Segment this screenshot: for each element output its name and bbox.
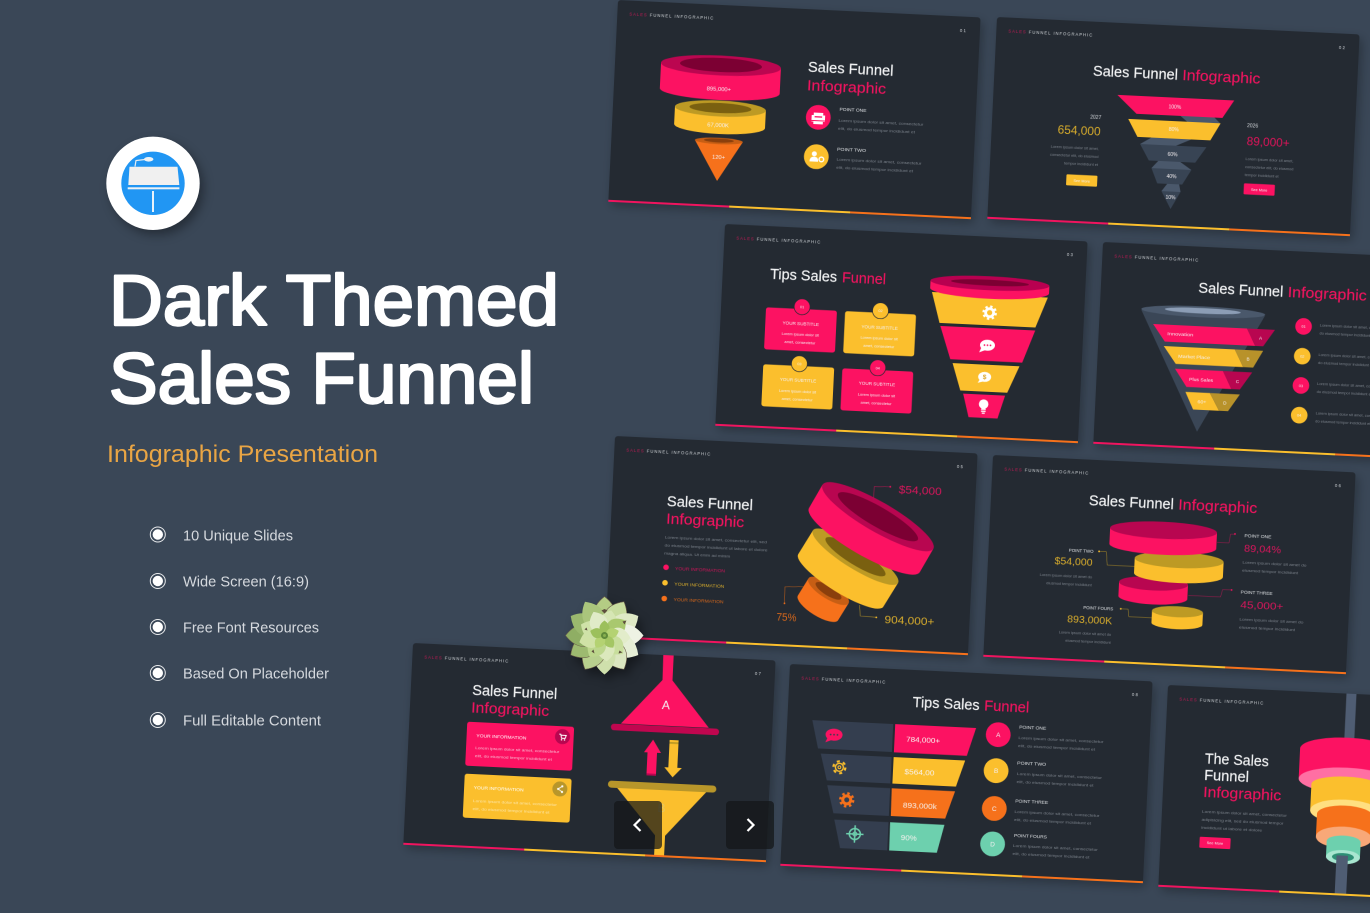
card: yellow information: YOUR INFORMATION: [474, 785, 524, 792]
icon: presentation app logo: [106, 137, 200, 230]
text: point fours: POINT FOURS: [1083, 605, 1113, 611]
list: points A to D: D: [990, 841, 995, 849]
text: point three: 45,000+: [1240, 599, 1284, 613]
card 01: 01: [800, 305, 804, 309]
heading: Infographic: [666, 512, 745, 531]
list: points A to D: elit, do eiusmod tempor incididunt et: [1014, 817, 1092, 826]
list of numbered points: 02: [1300, 355, 1304, 359]
heading: Sales Funnel: [472, 683, 558, 703]
text: point fours: eiusmod tempor incididunt: [1065, 638, 1112, 645]
panel: slide 05 tilted 3D funnel: SALES FUNNEL INFOGRAPHIC: [626, 448, 710, 457]
panel: slide 01 three tier funnel: [608, 0, 981, 219]
feature list: Free Font Resources: [183, 620, 319, 636]
text: point one: elit, do eiusmod tempor incididunt et: [838, 126, 916, 134]
funnel graphic: 10%: [1165, 195, 1176, 201]
text: point three: eiusmod tempor incididunt: [1239, 625, 1296, 632]
feature list: [150, 527, 329, 730]
heading: [666, 494, 753, 532]
title: Dark Themed: [109, 262, 559, 341]
text: point one: POINT ONE: [1244, 533, 1272, 539]
panel: slide 08 tips funnel table: SALES FUNNEL INFOGRAPHIC: [801, 676, 885, 685]
list: points A to D: C: [992, 806, 997, 813]
card 03: YOUR SUBTITLE: [780, 377, 816, 384]
feature list: Wide Screen (16:9): [183, 574, 309, 590]
card 03: Lorem ipsum dolor sit: [779, 388, 817, 395]
heading: Infographic: [1203, 785, 1282, 805]
callout: $54,000: [874, 483, 942, 503]
list: points A to D: Lorem ipsum dolor sit amet, consectetur: [1017, 771, 1103, 780]
funnel graphic: 40%: [1166, 174, 1177, 180]
card 02: 02: [878, 309, 883, 313]
funnel graphic: [656, 53, 781, 184]
nav button: next: [726, 801, 774, 849]
list of numbered points: [1291, 318, 1370, 428]
funnel graphic: [789, 470, 944, 632]
funnel graphic: [1095, 519, 1236, 632]
funnel graphic: 67,000K: [707, 122, 729, 129]
funnel graphic: 100%: [1168, 105, 1182, 111]
card: yellow information: [463, 774, 572, 823]
funnel graphic: [1136, 303, 1276, 435]
icon: chat: [825, 728, 843, 743]
funnel table: 893,000k: [903, 801, 937, 811]
heading: Sales Funnel: [667, 494, 753, 514]
description: adipisicing elit, sed do eiusmod tempor: [1201, 817, 1284, 826]
card 04: YOUR SUBTITLE: [859, 381, 895, 387]
text: point one: Lorem ipsum dolor sit amet, consectetur: [838, 118, 924, 127]
list: points A to D: POINT TWO: [1017, 761, 1047, 767]
funnel graphic: 80%: [1169, 127, 1179, 134]
list of numbered points: 01: [1301, 325, 1306, 329]
description: magna aliqua. Ut enim ad minim: [664, 551, 730, 559]
funnel graphic: Innovation: [1167, 331, 1194, 338]
card 02: YOUR SUBTITLE: [861, 324, 898, 331]
funnel graphic: B: [1246, 357, 1250, 362]
text: point one: 89,04%: [1244, 543, 1281, 556]
heading: Infographic: [1178, 497, 1258, 517]
subtitle: Infographic Presentation: [107, 441, 378, 468]
text: point one: [838, 107, 925, 135]
list: points A to D: [980, 722, 1105, 861]
icon: gear: [983, 306, 996, 319]
panel: slide 06 stacked discs: 06: [1335, 483, 1342, 488]
funnel graphic: [1293, 691, 1370, 898]
button: see more pink: [1243, 183, 1275, 196]
card 04: 04: [876, 366, 880, 370]
callout: 75%: [776, 585, 803, 625]
funnel graphic: 120+: [712, 155, 726, 161]
feature list: Full Editable Content: [183, 714, 321, 730]
legend: YOUR INFORMATION: [675, 566, 725, 573]
legend: YOUR INFORMATION: [674, 582, 724, 589]
list: points A to D: elit, do eiusmod tempor incididunt et: [1017, 779, 1095, 788]
icon: printer: [805, 104, 831, 130]
description: Lorem ipsum dolor sit amet, consectetur elit, sed: [665, 535, 767, 544]
text: 2027 stat: [1050, 113, 1102, 167]
funnel graphic: A: [1259, 336, 1263, 341]
heading: [1203, 751, 1283, 805]
list: points A to D: Lorem ipsum dolor sit amet, consectetur: [1013, 843, 1099, 852]
icon: crosshair: [846, 825, 864, 843]
panel: slide 01 three tier funnel: 01: [960, 28, 967, 33]
text: 2026 stat: tempor incididunt et: [1245, 172, 1280, 179]
text: 2027 stat: 2027: [1090, 115, 1102, 121]
heading: Infographic: [1182, 68, 1261, 88]
card 03: 03: [797, 362, 802, 366]
card: yellow information: Lorem ipsum dolor sit amet, consectetur: [473, 798, 558, 807]
card: pink information: YOUR INFORMATION: [476, 733, 526, 741]
panel: slide 01 three tier funnel: SALES FUNNEL INFOGRAPHIC: [629, 12, 713, 21]
text: 2026 stat: consectetur elit, do eiusmod: [1245, 164, 1294, 171]
heading: The Sales: [1205, 751, 1269, 770]
list of numbered points: do eiusmod tempor incididunt et: [1315, 418, 1370, 426]
text: point three: [1239, 590, 1305, 633]
panel: slide 06 stacked discs: SALES FUNNEL INFOGRAPHIC: [1004, 467, 1088, 476]
button: see more yellow: See More: [1073, 179, 1090, 183]
list: points A to D: Lorem ipsum dolor sit amet, consectetur: [1014, 809, 1100, 818]
icon: succulent plant: [565, 596, 644, 675]
panel: slide 06 stacked discs: [983, 455, 1356, 674]
icon: light bulb: [978, 399, 989, 414]
nav button: previous: [614, 801, 662, 849]
feature list: Based On Placeholder: [183, 666, 329, 682]
heading: Sales Funnel: [1093, 64, 1178, 84]
heading: Sales Funnel: [808, 60, 894, 80]
callout: 904,000+: [859, 605, 935, 628]
button: see more pink: See More: [1251, 188, 1268, 192]
arrow: up: [643, 739, 662, 776]
card 04: Lorem ipsum dolor sit: [858, 392, 896, 398]
panel: slide 09 layered funnel: SALES FUNNEL INFOGRAPHIC: [1179, 697, 1263, 706]
panel: slide 08 tips funnel table: 08: [1132, 692, 1139, 697]
feature list: 10 Unique Slides: [183, 528, 293, 544]
heading: [912, 695, 1030, 717]
heading: Tips Sales: [770, 267, 837, 286]
description: Lorem ipsum dolor sit amet, consectetur: [1202, 809, 1288, 818]
card: yellow information: elit, do eiusmod tempor incididunt et: [473, 806, 551, 815]
funnel graphic: 60%: [1167, 152, 1178, 158]
panel: slide 02 inverted funnel: 02: [1339, 45, 1346, 50]
panel: slide 07 two funnels: [403, 643, 776, 862]
text: point two: Lorem ipsum dolor sit amet, consectetur: [836, 157, 922, 166]
heading: Funnel: [842, 270, 886, 288]
card 04: [840, 358, 914, 414]
card 01: YOUR SUBTITLE: [782, 320, 819, 327]
text: point three: POINT THREE: [1241, 590, 1273, 596]
icon: user with gear: [803, 144, 829, 170]
text: 2027 stat: Lorem ipsum dolor sit amet,: [1051, 144, 1099, 151]
funnel graphic: [1112, 95, 1234, 212]
panel: slide 02 inverted funnel: SALES FUNNEL INFOGRAPHIC: [1008, 29, 1092, 38]
legend: YOUR INFORMATION: [674, 597, 724, 604]
card 01: [764, 297, 837, 353]
heading: [471, 683, 558, 720]
description: [1201, 809, 1288, 834]
panel: slide 03 tips funnel: [715, 224, 1088, 443]
heading: Sales Funnel: [1198, 281, 1284, 301]
text: 2027 stat: tempor incididunt et: [1064, 160, 1099, 167]
button: see more yellow: [1066, 174, 1098, 187]
text: point one: Lorem ipsum dolor sit amet do: [1242, 560, 1307, 568]
card: pink information: Lorem ipsum dolor sit amet, consectetur: [475, 745, 560, 754]
card 02: amet, consectetur: [863, 343, 895, 349]
list of numbered points: 04: [1297, 414, 1301, 418]
text: point two: [836, 147, 923, 174]
text: point two: POINT TWO: [837, 147, 867, 153]
funnel graphic: Plus Sales: [1189, 377, 1214, 383]
card: pink information: [465, 722, 574, 771]
panel: slide 03 tips funnel: 03: [1067, 252, 1074, 257]
heading: [1198, 281, 1367, 305]
list: points A to D: elit, do eiusmod tempor incididunt et: [1012, 851, 1091, 860]
heading: Sales Funnel: [1089, 493, 1174, 513]
funnel B: [605, 781, 717, 860]
panel: slide 05 tilted 3D funnel: [605, 436, 978, 655]
text: point one: POINT ONE: [839, 107, 867, 113]
heading: [770, 267, 886, 288]
list: points A to D: A: [996, 732, 1001, 739]
card 02: [843, 301, 917, 356]
callout: 75%: 75%: [776, 612, 797, 625]
funnel graphic: C: [1236, 379, 1240, 384]
list of numbered points: 03: [1299, 384, 1303, 388]
text: point one: [1242, 533, 1308, 576]
heading: Infographic: [807, 78, 886, 98]
card 01: amet, consectetur: [784, 339, 816, 346]
text: point two: [1039, 546, 1094, 587]
list: points A to D: elit, do eiusmod tempor incididunt et: [1018, 743, 1096, 752]
text: point one: eiusmod tempor incididunt: [1242, 568, 1299, 575]
panel: slide 03 tips funnel: SALES FUNNEL INFOGRAPHIC: [736, 236, 820, 245]
title: [109, 262, 559, 419]
callout: 904,000+: 904,000+: [884, 614, 935, 628]
funnel table: 784,000+: [906, 735, 940, 745]
text: point two: eiusmod tempor incididunt: [1046, 580, 1093, 587]
heading: Funnel: [1204, 768, 1249, 786]
text: point fours: 893,000K: [1067, 613, 1112, 627]
text: 2026 stat: Lorem ipsum dolor sit amet,: [1245, 156, 1294, 163]
panel: slide 07 two funnels: 07: [755, 671, 762, 676]
arrow: down: [664, 740, 683, 778]
panel: slide 05 tilted 3D funnel: 05: [957, 464, 964, 469]
funnel A: A: [662, 698, 670, 712]
panel: slide 04 cone funnel: SALES FUNNEL INFOGRAPHIC: [1114, 254, 1198, 263]
card 01: Lorem ipsum dolor sit: [782, 331, 820, 338]
list: points A to D: B: [994, 768, 998, 775]
icon: dollar chat: [978, 372, 991, 383]
heading: Infographic: [471, 700, 550, 720]
list: points A to D: POINT ONE: [1019, 725, 1046, 731]
icon: gear: [840, 793, 854, 807]
heading: [1093, 64, 1261, 88]
text: 2026 stat: 2026: [1247, 123, 1259, 130]
card 02: Lorem ipsum dolor sit: [861, 335, 899, 341]
heading: Infographic: [1287, 285, 1367, 305]
card 03: [761, 354, 835, 410]
heading: [807, 60, 894, 98]
text: 2027 stat: 654,000: [1057, 125, 1101, 139]
funnel graphic: D: [1223, 400, 1227, 406]
funnel graphic: 60+: [1197, 399, 1207, 405]
list: points A to D: POINT FOURS: [1014, 833, 1047, 840]
description: do eiusmod tempor incididunt ut labore et dolore: [665, 543, 768, 552]
list: points A to D: POINT THREE: [1015, 798, 1048, 805]
funnel table: 90%: [901, 833, 918, 843]
funnel table: [806, 720, 976, 854]
text: point two: elit, do eiusmod tempor incididunt et: [836, 165, 914, 173]
text: point two: Lorem ipsum dolor sit amet do: [1040, 572, 1092, 579]
text: point three: Lorem ipsum dolor sit amet do: [1239, 617, 1303, 625]
text: 2026 stat: [1245, 123, 1296, 179]
panel: slide 09 layered funnel: [1158, 685, 1370, 904]
panel: slide 02 inverted funnel: [987, 17, 1360, 236]
description: [664, 535, 768, 560]
panel: slide 04 cone funnel: [1093, 242, 1370, 461]
funnel A: [611, 653, 723, 735]
text: 2027 stat: consectetur elit, do eiusmod: [1050, 152, 1099, 159]
card 04: amet, consectetur: [861, 400, 892, 406]
funnel table: $564,00: [904, 767, 935, 778]
panel: slide 07 two funnels: SALES FUNNEL INFOGRAPHIC: [424, 655, 508, 664]
text: point two: POINT TWO: [1069, 548, 1094, 554]
card 03: amet, consectetur: [782, 396, 813, 402]
heading: Tips Sales: [912, 695, 980, 714]
text: 2026 stat: 89,000+: [1246, 136, 1290, 150]
panel: slide 08 tips funnel table: [780, 664, 1153, 883]
button: see more: [1199, 837, 1231, 849]
icon: dollar chat: $: [983, 374, 987, 381]
icon: chat: [979, 339, 995, 353]
list: points A to D: Lorem ipsum dolor sit amet, consectetur: [1018, 735, 1104, 744]
button: see more: See More: [1207, 841, 1223, 846]
callout: $54,000: $54,000: [898, 484, 942, 498]
heading: Funnel: [984, 698, 1030, 717]
funnel graphic: 895,000+: [706, 86, 732, 94]
funnel graphic: [924, 273, 1050, 421]
text: point fours: [1058, 604, 1113, 645]
text: point two: $54,000: [1054, 555, 1093, 569]
card: pink information: elit, do eiusmod tempor incididunt et: [475, 753, 553, 762]
funnel graphic: Market Place: [1178, 354, 1211, 360]
funnel B: B: [657, 801, 666, 815]
legend: [661, 564, 725, 604]
icon: hexagon gear: [833, 761, 846, 774]
title: Sales Funnel: [109, 340, 534, 419]
heading: [1089, 493, 1258, 517]
description: incididunt ut labore et dolore: [1201, 825, 1262, 833]
text: point fours: Lorem ipsum dolor sit amet do: [1059, 629, 1111, 637]
